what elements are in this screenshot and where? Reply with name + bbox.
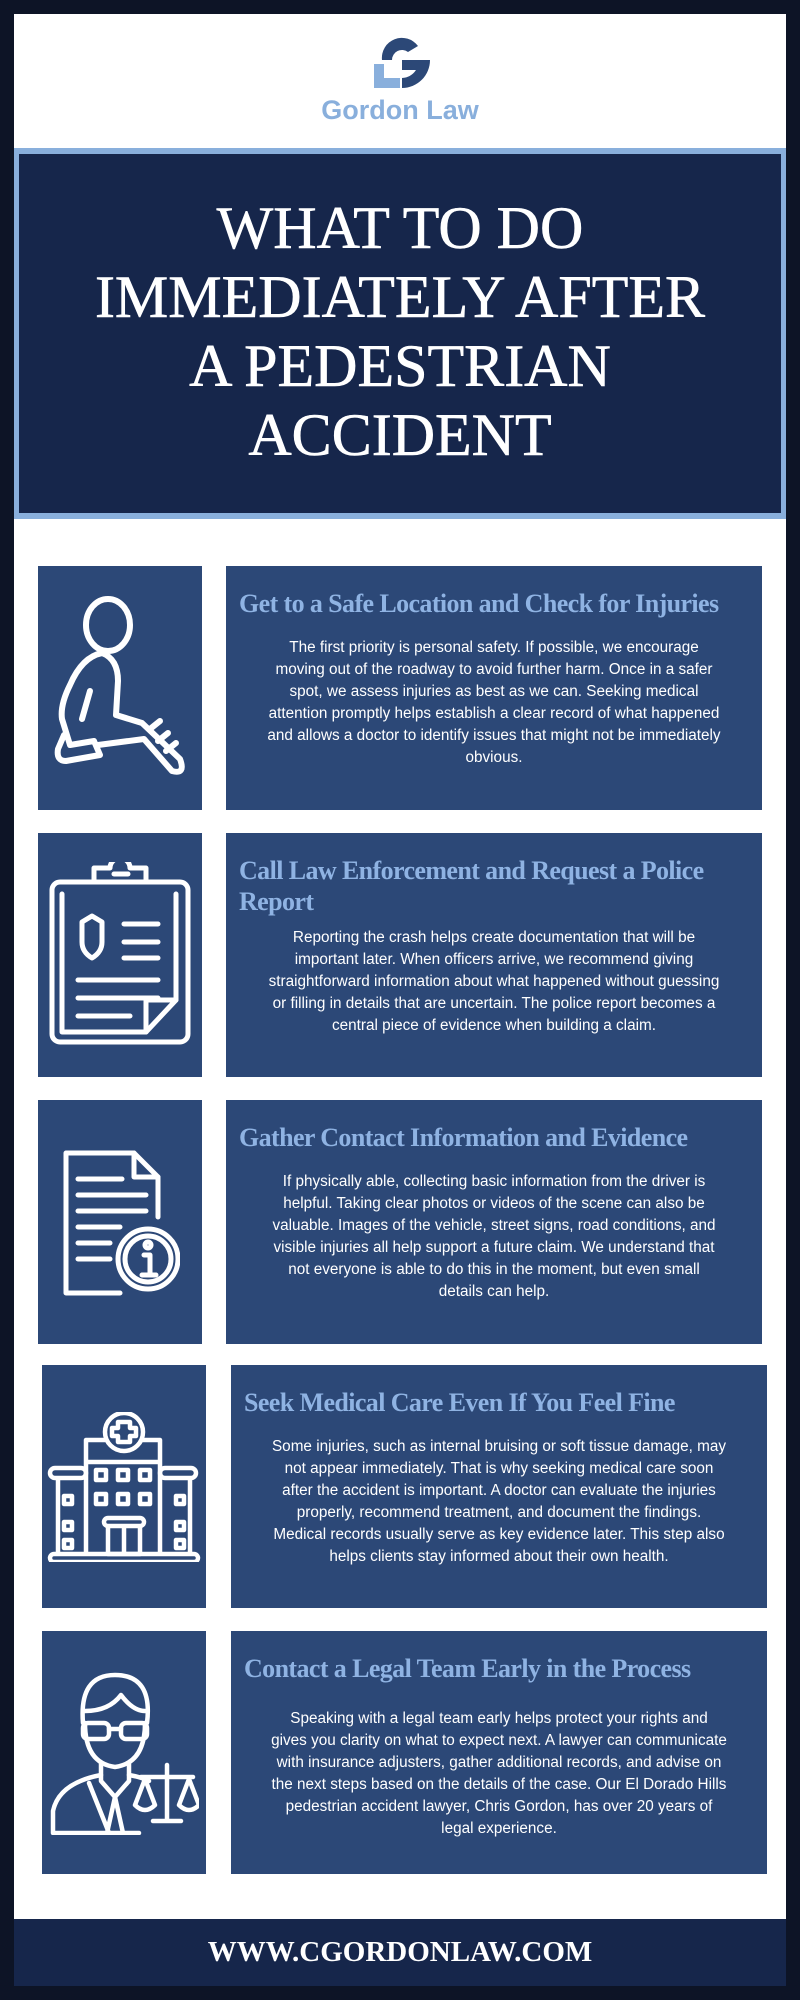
panel 5 text	[231, 1631, 767, 1874]
footer url	[14, 1919, 786, 1986]
heading 3: Gather Contact Information and Evidence	[239, 1123, 687, 1152]
panel 1 text	[226, 566, 762, 810]
panel 2 icon: clipboard police	[38, 833, 202, 1077]
title: IMMEDIATELY AFTER	[95, 264, 705, 330]
body 3: If physically able, collecting basic information from the driver is helpful. Taking clear photos or videos of the scene can also be valuable. Images of the vehicle, street signs, road conditions, and visible injuries all help support a future claim. We understand that not everyone is able to do this in the moment, but even small details can help.	[272, 1173, 716, 1300]
body 4: Some injuries, such as internal bruising or soft tissue damage, may not appear immediately. That is why seeking medical care soon after the accident is important. A doctor can evaluate the injuries properly, recommend treatment, and document the findings. Medical records usually serve as key evidence later. This step also helps clients stay informed about their own health.	[272, 1438, 726, 1565]
body 1: The first priority is personal safety. If possible, we encourage moving out of the roadway to avoid further harm. Once in a safer spot, we assess injuries as best as we can. Seeking medical attention promptly helps establish a clear record of what happened and allows a doctor to identify issues that might not be immediately obvious.	[267, 639, 721, 766]
heading 5: Contact a Legal Team Early in the Process	[244, 1654, 690, 1683]
heading 4: Seek Medical Care Even If You Feel Fine	[244, 1388, 675, 1417]
heading 2: Call Law Enforcement and Request a Police Report	[239, 856, 704, 916]
panel 4 text	[231, 1365, 767, 1608]
panel 3 icon: document info	[38, 1100, 202, 1344]
icon: logo mark	[374, 38, 430, 88]
body 5: Speaking with a legal team early helps protect your rights and gives you clarity on what to expect next. A lawyer can communicate with insurance adjusters, gather additional records, and advise on the next steps based on the details of the case. Our El Dorado Hills pedestrian accident lawyer, Chris Gordon, has over 20 years of legal experience.	[271, 1710, 727, 1837]
title: ACCIDENT	[248, 402, 552, 468]
footer url: WWW.CGORDONLAW.COM	[208, 1936, 592, 1968]
panel 4 icon: hospital	[42, 1365, 206, 1608]
panel 2 text	[226, 833, 762, 1077]
title: WHAT TO DO	[217, 195, 583, 261]
title	[14, 148, 786, 519]
logo	[321, 38, 479, 125]
body 2: Reporting the crash helps create documentation that will be important later. When officers arrive, we recommend giving straightforward information about what happened without guessing or filling in details that are uncertain. The police report becomes a central piece of evidence when building a claim.	[269, 929, 719, 1034]
panel 5 icon: lawyer with scales	[42, 1631, 206, 1874]
panel 1 icon: injured person	[38, 566, 202, 810]
logo text: Gordon Law	[321, 95, 479, 125]
title: A PEDESTRIAN	[189, 333, 611, 399]
heading 1: Get to a Safe Location and Check for Injuries	[239, 589, 719, 618]
panel 3 text	[226, 1100, 762, 1344]
